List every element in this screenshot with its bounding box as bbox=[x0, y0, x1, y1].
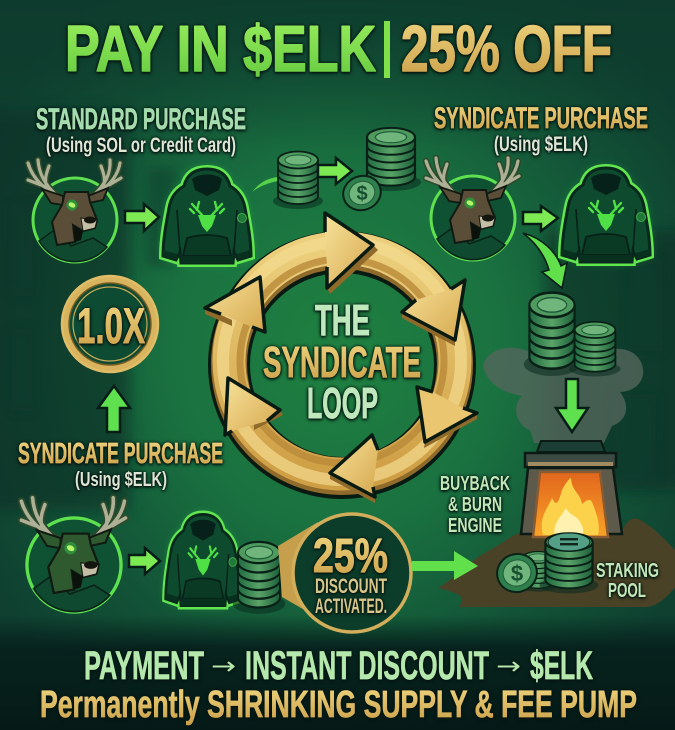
bottom line one: INSTANT DISCOUNT bbox=[245, 644, 489, 688]
bottom line one: → bbox=[211, 652, 236, 680]
heading: syndicate purchase top right bbox=[434, 102, 648, 156]
badge: 25% discount: ACTIVATED. bbox=[315, 595, 387, 618]
loop center label bbox=[263, 296, 421, 428]
icon: hoodie top right bbox=[562, 168, 650, 262]
arrow: up to 1.0x bbox=[98, 386, 130, 432]
heading: syndicate purchase top right: (Using $ELK) bbox=[494, 133, 588, 156]
arrow: swoosh to coins bbox=[252, 177, 278, 192]
label: staking pool bbox=[596, 560, 659, 602]
heading: standard purchase bbox=[36, 103, 246, 157]
badge: 1.0x: 1.0X bbox=[77, 298, 145, 354]
bottom line one: $ELK bbox=[530, 644, 593, 688]
discount wedge bbox=[278, 522, 318, 612]
badge: 1.0x bbox=[62, 276, 158, 372]
smoke bbox=[483, 348, 643, 443]
icon: hoodie standard bbox=[163, 169, 251, 263]
label: buyback and burn engine: BUYBACK bbox=[440, 473, 510, 495]
icon: staking coins: $ bbox=[511, 561, 523, 586]
heading: syndicate purchase bottom left: (Using $ELK) bbox=[75, 469, 167, 491]
icon: coin stack large bbox=[361, 128, 421, 191]
label: buyback and burn engine: ENGINE bbox=[448, 515, 502, 537]
icon: tilted dollar coin bbox=[338, 171, 386, 215]
icon: coin stack small bbox=[273, 152, 323, 209]
icon: deer syndicate top right bbox=[426, 158, 519, 260]
label: buyback and burn engine: & BURN bbox=[448, 494, 502, 516]
bottom line one: PAYMENT bbox=[84, 644, 204, 688]
icon: staking coins bbox=[492, 533, 598, 598]
badge: 25% discount: 25% bbox=[313, 530, 388, 583]
arrow: deer to hoodie right bbox=[523, 206, 558, 231]
arrow: deer to hoodie bbox=[125, 204, 159, 231]
mound of dirt bbox=[438, 519, 675, 607]
bottom line one: → bbox=[496, 652, 521, 680]
icon: tilted dollar coin: $ bbox=[356, 183, 368, 205]
icon: hoodie bottom bbox=[166, 514, 240, 606]
badge: 25% discount: DISCOUNT bbox=[315, 575, 387, 598]
heading: standard purchase: (Using SOL or Credit Card) bbox=[46, 134, 236, 157]
loop center label: THE bbox=[315, 296, 370, 345]
icon: deer standard bbox=[28, 160, 121, 262]
loop ring with arrows bbox=[205, 213, 477, 503]
furnace bbox=[521, 441, 622, 537]
heading: standard purchase: STANDARD PURCHASE bbox=[36, 103, 246, 136]
bottom line one bbox=[84, 644, 593, 688]
label: staking pool: POOL bbox=[608, 580, 646, 602]
arrow: coins into furnace bbox=[556, 379, 588, 432]
title: PAY IN $ELK bbox=[65, 12, 376, 85]
heading: syndicate purchase bottom left bbox=[18, 438, 223, 491]
loop center label: LOOP bbox=[307, 379, 378, 428]
arrow: deer to hoodie bottom bbox=[129, 548, 160, 574]
icon: deer syndicate bottom bbox=[21, 498, 126, 612]
icon: coin stack bottom bbox=[233, 542, 285, 614]
badge: 25% discount bbox=[293, 514, 411, 632]
arrow: discount to burn engine bbox=[412, 551, 478, 580]
heading: syndicate purchase bottom left: SYNDICATE PURCHASE bbox=[18, 438, 223, 470]
icon: coin stacks right bbox=[524, 293, 620, 376]
arrow: coins to stack bbox=[318, 158, 352, 184]
label: buyback and burn engine bbox=[440, 473, 510, 537]
loop center label: SYNDICATE bbox=[263, 338, 421, 387]
title: 25% OFF bbox=[401, 12, 612, 85]
arrow: curved hoodie to coins bbox=[523, 233, 567, 288]
